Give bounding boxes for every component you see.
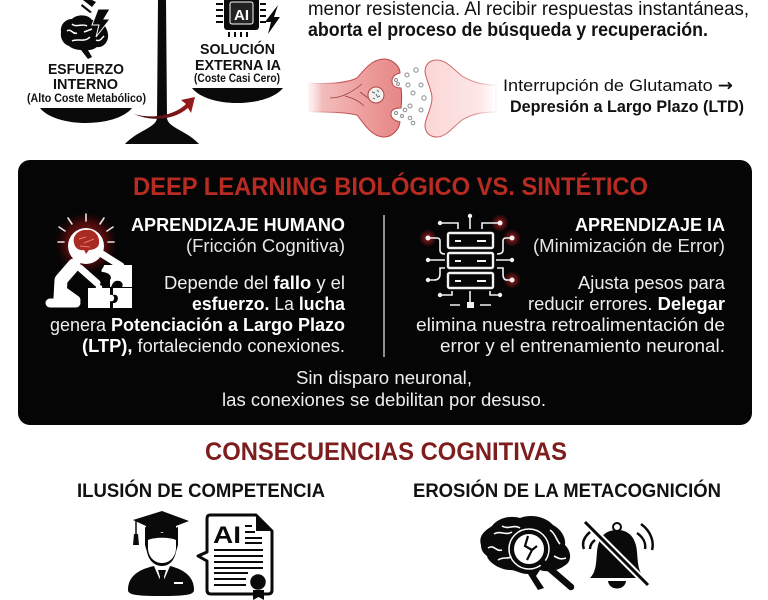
label: internal effort: INTERNO [53,76,118,93]
caption: glutamate interruption: Depresión a Largo Plazo (LTD) [510,97,744,116]
label: external AI solution [194,40,281,85]
column: AI learning: error y el entrenamiento neuronal. [440,336,725,356]
subheading: illusion of competence: ILUSIÓN DE COMPETENCIA [77,480,325,502]
panel heading: DEEP LEARNING BIOLÓGICO VS. SINTÉTICO [133,171,648,201]
label: external AI solution: EXTERNA IA [195,57,281,74]
column: AI learning: reducir errores. Delegar [528,294,725,314]
column: AI learning: APRENDIZAJE IA [575,214,725,235]
label: external AI solution: SOLUCIÓN [200,40,275,58]
text block: minimal resistance [308,0,749,41]
column: AI learning: (Minimización de Error) [533,236,725,256]
icon: brain under magnifying glass [480,516,571,590]
icon: person assembling puzzle [50,212,132,308]
column: human learning: genera Potenciación a Largo Plazo [50,315,345,335]
postsynaptic neuron [425,60,496,137]
arrow toward AI solution [134,97,195,119]
icon: muted bell [583,522,653,588]
closing note: Sin disparo neuronal, [296,368,472,388]
label: internal effort: ESFUERZO [48,61,124,78]
closing note: las conexiones se debilitan por desuso. [222,390,546,410]
icon: AI chip with lightning: AI [234,7,249,24]
icon: graduate with AI document: AI [213,522,241,549]
scale stand [125,0,199,144]
left pan [40,108,132,123]
column: human learning: APRENDIZAJE HUMANO [131,214,345,235]
icon: graduate with AI document [128,511,272,600]
column: AI learning [416,214,726,356]
label: external AI solution: (Coste Casi Cero) [194,73,280,85]
column: AI learning: elimina nuestra retroalimentación de [416,315,725,335]
balance scale illustration [27,0,283,144]
caption: glutamate interruption: Interrupción de Glutamato → [503,76,733,96]
synapse illustration [308,59,496,137]
caption: glutamate interruption [503,76,744,116]
column: human learning: esfuerzo. La lucha [192,294,346,314]
column: human learning [50,214,346,356]
icon: AI chip with lightning [216,0,280,37]
label: internal effort: (Alto Coste Metabólico) [27,93,146,105]
icon: brain with lightning [61,0,110,59]
presynaptic neuron [308,59,402,137]
icon: server network [419,214,521,308]
column: human learning: (Fricción Cognitiva) [186,236,345,256]
heading: cognitive consequences: CONSECUENCIAS COGNITIVAS [205,438,567,466]
panel: deep learning comparison [18,160,752,425]
nucleus [368,87,384,103]
closing note [222,368,546,410]
column: human learning: (LTP), fortaleciendo conexiones. [82,336,345,356]
column: AI learning: Ajusta pesos para [578,273,726,293]
label: internal effort [27,61,146,105]
subheading: erosion of metacognition: EROSIÓN DE LA METACOGNICIÓN [413,480,721,502]
vesicles [394,68,426,125]
figure body [50,254,121,303]
right pan [192,88,283,103]
column: human learning: Depende del fallo y el [164,273,345,293]
puzzle pieces [101,265,132,287]
text block: minimal resistance: aborta el proceso de búsqueda y recuperación. [308,20,708,41]
